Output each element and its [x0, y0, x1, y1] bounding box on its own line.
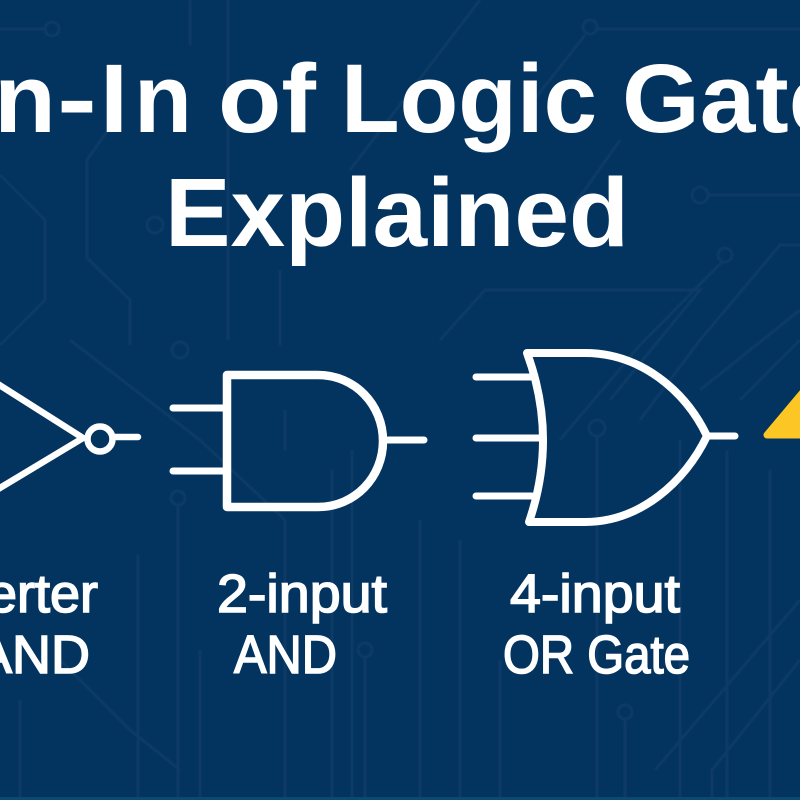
bottom edge line [0, 797, 800, 800]
label: inverter NAND [0, 564, 98, 685]
title line 1: of [218, 44, 317, 153]
label: 4-input OR Gate: 4-input [510, 564, 680, 624]
label: 2-input AND [217, 564, 387, 685]
title line 2: Explained [165, 158, 629, 267]
icon: 4-input OR gate [476, 353, 735, 522]
label: 4-input OR Gate: OR Gate [503, 625, 690, 685]
title line 1: I [100, 44, 128, 153]
label: 4-input OR Gate [503, 564, 690, 685]
label: 2-input AND: 2-input [217, 564, 387, 624]
icon: 2-input AND gate [173, 375, 424, 507]
title line 1: - [57, 44, 97, 153]
title line 1 [0, 44, 800, 153]
label: 2-input AND: AND [234, 625, 337, 685]
icon: yellow warning triangle [767, 360, 800, 435]
title [0, 44, 800, 267]
title line 1: Logic [341, 44, 597, 153]
icon: inverter NAND gate [0, 379, 138, 494]
title line 1: n [134, 44, 192, 153]
